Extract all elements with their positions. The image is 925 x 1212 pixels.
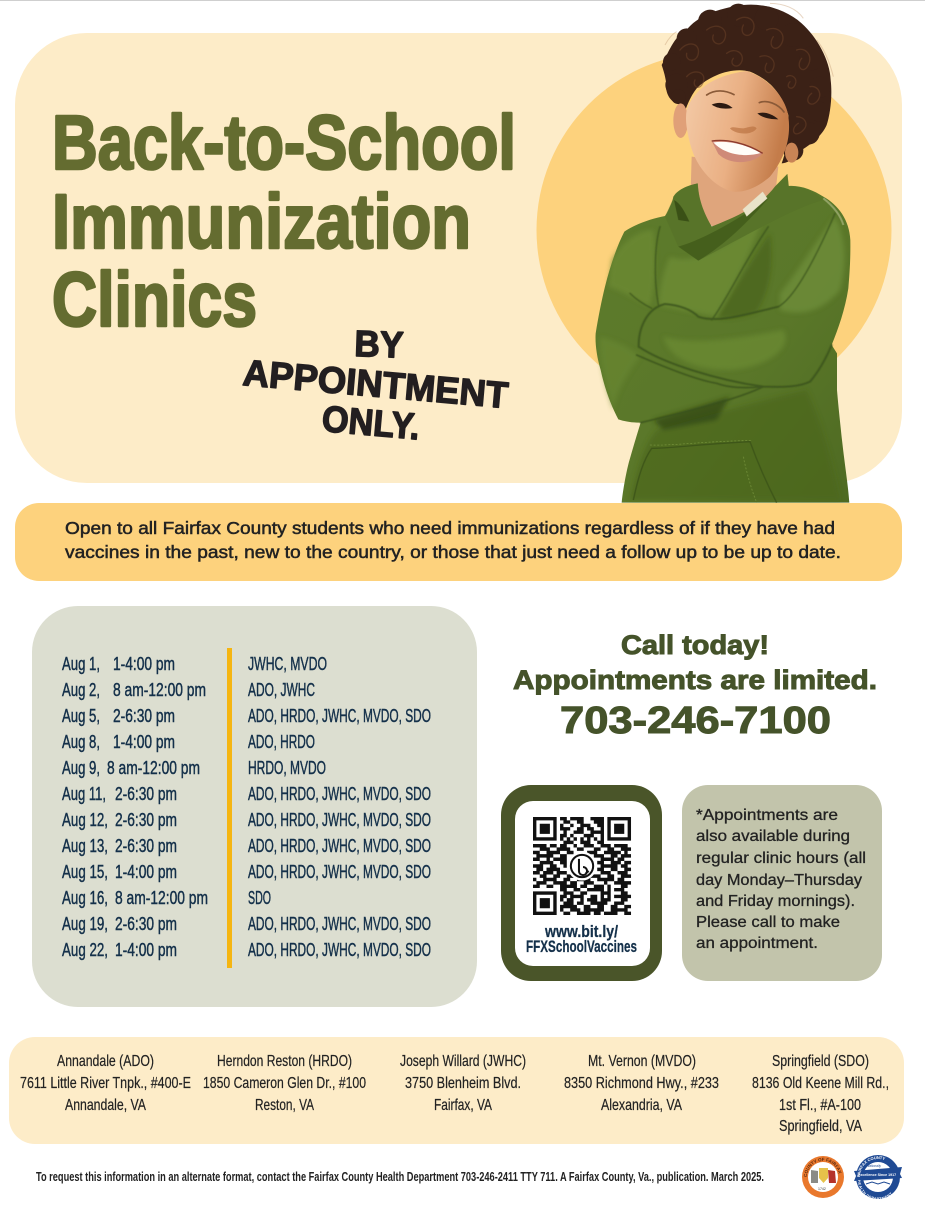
panel: clinic schedule bbox=[32, 606, 477, 1007]
call to action heading and phone number: Call today! bbox=[621, 630, 769, 660]
note text: Please call to make bbox=[696, 914, 840, 931]
collar bbox=[665, 174, 843, 261]
schedule clinic locations: SDO bbox=[248, 888, 271, 908]
title: Immunization bbox=[52, 179, 471, 265]
icon: Fairfax County seal: 1742 bbox=[818, 1187, 826, 1191]
address: Herndon Reston bbox=[203, 1053, 366, 1114]
note text: an appointment. bbox=[696, 935, 818, 952]
schedule dates and times: Aug 1, bbox=[62, 654, 100, 674]
icon: Fairfax County Health Department seal: Nationally bbox=[867, 1164, 881, 1168]
crossed arms bbox=[630, 213, 835, 423]
photo: smiling boy in green sweatshirt bbox=[596, 3, 850, 503]
schedule dates and times: 8 am-12:00 pm bbox=[113, 680, 206, 700]
schedule dates and times: Aug 8, bbox=[62, 732, 100, 752]
title: Back-to-School bbox=[52, 100, 516, 186]
note text: regular clinic hours (all bbox=[696, 850, 866, 867]
schedule clinic locations: ADO, HRDO, JWHC, MVDO, SDO bbox=[248, 940, 431, 960]
schedule dates and times: 2-6:30 pm bbox=[115, 836, 177, 856]
address: Joseph Willard: Joseph Willard (JWHC) bbox=[400, 1053, 526, 1070]
by appointment only handwritten note: BY bbox=[354, 323, 404, 366]
address: Joseph Willard: Fairfax, VA bbox=[434, 1097, 492, 1114]
icon: Fairfax County seal: COUNTY OF FAIRFAX bbox=[804, 1158, 842, 1177]
schedule dates and times: 2-6:30 pm bbox=[115, 914, 177, 934]
address: Springfield: 8136 Old Keene Mill Rd., bbox=[752, 1075, 889, 1092]
schedule dates and times: 8 am-12:00 pm bbox=[107, 758, 200, 778]
panel: regular hours note bbox=[682, 785, 882, 981]
eyes bbox=[707, 91, 784, 119]
address: Annandale: Annandale, VA bbox=[65, 1097, 146, 1114]
icon: Fairfax County Health Department seal: HEALTH DEPARTMENT bbox=[858, 1180, 892, 1199]
sweatshirt shading bbox=[600, 217, 845, 500]
panel: QR code card bbox=[501, 785, 662, 981]
schedule dates and times: Aug 12, bbox=[62, 810, 108, 830]
neck and shirt bbox=[690, 157, 778, 230]
schedule clinic locations: ADO, HRDO, JWHC, MVDO, SDO bbox=[248, 862, 431, 882]
address: Mt. Vernon bbox=[564, 1053, 719, 1114]
call to action heading and phone number: Appointments are limited. bbox=[513, 665, 877, 695]
schedule dates and times: 1-4:00 pm bbox=[115, 862, 177, 882]
address: Springfield bbox=[752, 1053, 889, 1135]
address: Joseph Willard bbox=[400, 1053, 526, 1114]
schedule dates and times: 2-6:30 pm bbox=[115, 784, 177, 804]
schedule clinic locations: ADO, HRDO, JWHC, MVDO, SDO bbox=[248, 784, 431, 804]
schedule dates and times: Aug 9, bbox=[62, 758, 100, 778]
schedule clinic locations: ADO, HRDO, JWHC, MVDO, SDO bbox=[248, 914, 431, 934]
schedule dates and times bbox=[62, 654, 208, 960]
hair bbox=[662, 3, 833, 163]
address: Annandale bbox=[20, 1053, 191, 1114]
schedule dates and times: 1-4:00 pm bbox=[113, 732, 175, 752]
smile bbox=[712, 140, 763, 162]
schedule dates and times: 8 am-12:00 pm bbox=[115, 888, 208, 908]
schedule dates and times: Aug 2, bbox=[62, 680, 100, 700]
divider bar bbox=[227, 648, 232, 968]
schedule dates and times: Aug 22, bbox=[62, 940, 108, 960]
icon: Fairfax County Health Department seal bbox=[854, 1155, 902, 1199]
address: Herndon Reston: Herndon Reston (HRDO) bbox=[217, 1053, 352, 1070]
address: Annandale: Annandale (ADO) bbox=[57, 1053, 154, 1070]
eligibility text: Open to all Fairfax County students who need immunizations regardless of if they have had bbox=[65, 518, 835, 538]
schedule clinic locations: ADO, HRDO, JWHC, MVDO, SDO bbox=[248, 836, 431, 856]
QR short link bbox=[526, 922, 637, 956]
schedule dates and times: 1-4:00 pm bbox=[115, 940, 177, 960]
address: Herndon Reston: 1850 Cameron Glen Dr., #100 bbox=[203, 1075, 366, 1092]
kangaroo pocket bbox=[633, 441, 777, 503]
note text: day Monday–Thursday bbox=[696, 872, 862, 889]
icon: Fairfax County seal bbox=[802, 1156, 844, 1198]
address: Mt. Vernon: Mt. Vernon (MVDO) bbox=[588, 1053, 696, 1070]
address: Mt. Vernon: 8350 Richmond Hwy., #233 bbox=[564, 1075, 719, 1092]
schedule dates and times: 2-6:30 pm bbox=[115, 810, 177, 830]
schedule clinic locations: ADO, HRDO, JWHC, MVDO, SDO bbox=[248, 810, 431, 830]
schedule clinic locations: ADO, HRDO bbox=[248, 732, 315, 752]
nose bbox=[730, 127, 757, 133]
address: Springfield: 1st Fl., #A-100 bbox=[779, 1097, 861, 1114]
schedule clinic locations: ADO, JWHC bbox=[248, 680, 315, 700]
schedule clinic locations: JWHC, MVDO bbox=[248, 654, 327, 674]
call to action heading and phone number bbox=[513, 630, 877, 742]
by appointment only handwritten note: APPOINTMENT bbox=[241, 352, 510, 416]
schedule dates and times: 2-6:30 pm bbox=[113, 706, 175, 726]
QR code bbox=[533, 819, 631, 913]
ears bbox=[673, 103, 688, 138]
schedule dates and times: Aug 13, bbox=[62, 836, 108, 856]
note text bbox=[696, 807, 866, 952]
by appointment only handwritten note: ONLY. bbox=[320, 398, 422, 448]
address: Springfield: Springfield (SDO) bbox=[772, 1053, 869, 1070]
schedule dates and times: Aug 11, bbox=[62, 784, 106, 804]
title: Clinics bbox=[52, 257, 257, 343]
schedule dates and times: Aug 5, bbox=[62, 706, 100, 726]
panel: clinic addresses bbox=[9, 1037, 904, 1144]
address: Springfield: Springfield, VA bbox=[779, 1118, 862, 1135]
note text: and Friday mornings). bbox=[696, 893, 855, 910]
icon: Fairfax County Health Department seal: FAIRFAX COUNTY bbox=[857, 1156, 886, 1177]
schedule dates and times: Aug 16, bbox=[62, 888, 108, 908]
address: Annandale: 7611 Little River Tnpk., #400-E bbox=[20, 1075, 191, 1092]
schedule dates and times: Aug 15, bbox=[62, 862, 108, 882]
schedule clinic locations: ADO, HRDO, JWHC, MVDO, SDO bbox=[248, 706, 431, 726]
panel: eligibility banner bbox=[15, 503, 902, 581]
address: Herndon Reston: Reston, VA bbox=[255, 1097, 314, 1114]
QR short link: www.bit.ly/ bbox=[544, 922, 618, 941]
QR short link: FFXSchoolVaccines bbox=[526, 937, 637, 956]
address: Joseph Willard: 3750 Blenheim Blvd. bbox=[405, 1075, 521, 1092]
icon: Fairfax County Health Department seal: Excellence Since 1917 bbox=[858, 1173, 896, 1177]
by appointment only handwritten note bbox=[241, 323, 510, 448]
schedule clinic locations: HRDO, MVDO bbox=[248, 758, 326, 778]
schedule clinic locations bbox=[248, 654, 431, 960]
decorative circle behind the boy bbox=[536, 52, 892, 408]
schedule dates and times: Aug 19, bbox=[62, 914, 108, 934]
eligibility text bbox=[65, 518, 841, 562]
panel: hero background bbox=[15, 33, 902, 483]
note text: also available during bbox=[696, 828, 850, 845]
note text: *Appointments are bbox=[696, 807, 838, 824]
schedule dates and times: 1-4:00 pm bbox=[113, 654, 175, 674]
face bbox=[686, 71, 789, 192]
sweatshirt bbox=[596, 174, 850, 503]
address: Mt. Vernon: Alexandria, VA bbox=[601, 1097, 682, 1114]
eligibility text: vaccines in the past, new to the country, or those that just need a follow up to be up to date. bbox=[65, 542, 841, 562]
title bbox=[52, 100, 516, 343]
call to action heading and phone number: 703-246-7100 bbox=[560, 700, 831, 742]
